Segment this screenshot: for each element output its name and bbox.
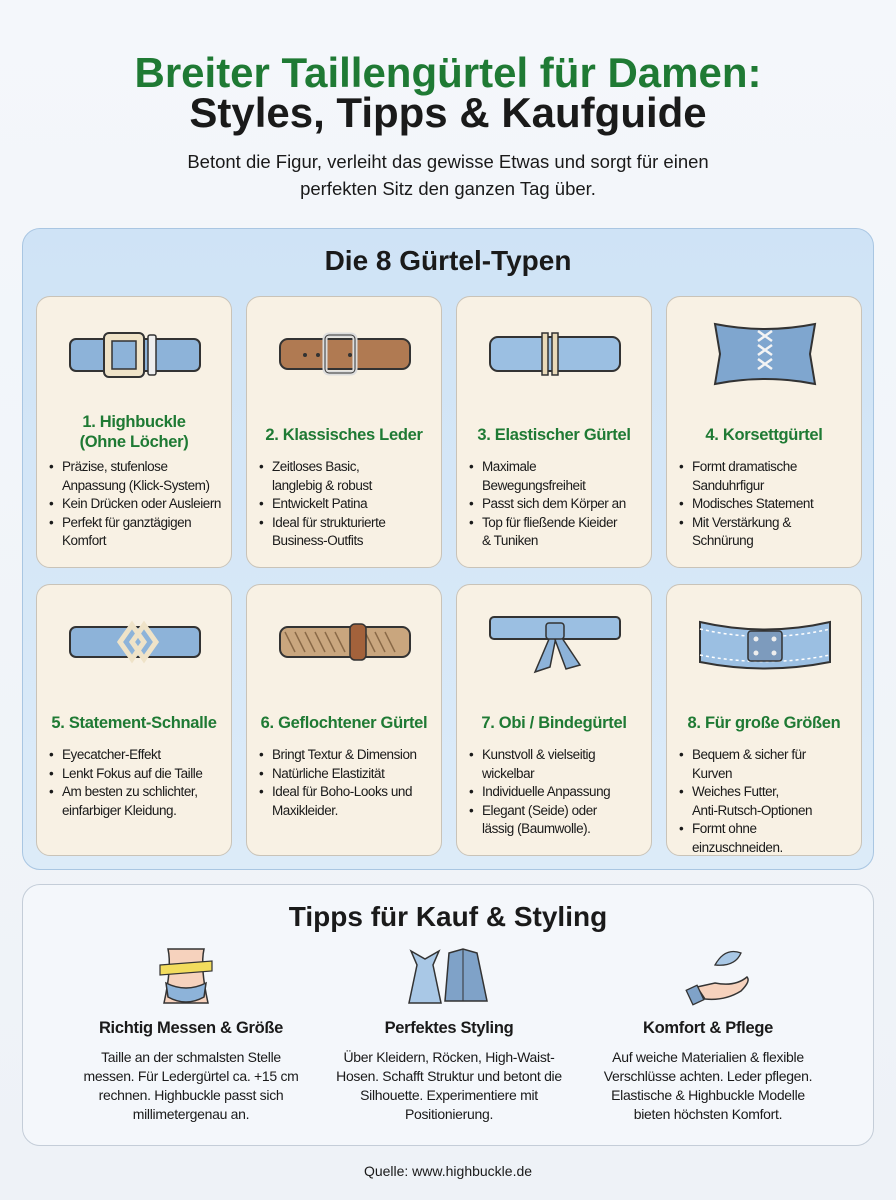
- card 7: [456, 584, 652, 856]
- icon: obi belt: [489, 616, 621, 674]
- card 8: [666, 584, 862, 856]
- bullets 3: Maximale: [482, 459, 536, 474]
- footer: source: Quelle: www.highbuckle.de: [364, 1163, 532, 1179]
- title: Styles, Tipps & Kaufguide: [189, 89, 707, 136]
- bullets 1: Präzise, stufenlose Anpassung (Klick-System): [62, 459, 210, 492]
- title 3: 3. Elastischer Gürtel: [477, 426, 631, 444]
- bullets 7: Kunstvoll & vielseitig wickelbar: [482, 747, 595, 780]
- bullets 4: Modisches Statement: [692, 496, 813, 511]
- bullets 6: [260, 747, 417, 818]
- icon: leather belt: [279, 332, 411, 376]
- bullets 8: Anti-Rutsch-Optionen: [692, 802, 812, 818]
- bullets 1: Perfekt für ganztägigen Komfort: [62, 514, 191, 548]
- tip 1: [83, 948, 299, 1122]
- title 1: (Ohne Löcher): [80, 433, 188, 451]
- bullets 7: Elegant (Seide) oder: [482, 802, 597, 818]
- bullets 4: Schnürung: [692, 533, 753, 548]
- title 1: 1. Highbuckle: [82, 413, 186, 431]
- bullets 2: Ideal für strukturierte Business-Outfits: [272, 514, 385, 548]
- heading: belt types: Die 8 Gürtel-Typen: [325, 245, 571, 276]
- card 3: [456, 296, 652, 568]
- title 7: 7. Obi / Bindegürtel: [481, 714, 627, 732]
- bullets 8: Formt ohne: [692, 821, 757, 836]
- tip 3: Komfort & Pflege: [643, 1019, 773, 1037]
- card 1: [36, 296, 232, 568]
- bullets 2: Zeitloses Basic,: [272, 459, 359, 474]
- icon: measuring tape: [159, 948, 213, 1004]
- icon: hand and feather: [685, 950, 749, 1006]
- tip 1: Richtig Messen & Größe: [99, 1019, 283, 1037]
- bullets 8: einzuschneiden.: [692, 840, 783, 854]
- icon: statement buckle: [69, 621, 201, 663]
- bullets 6: Ideal für Boho-Looks und Maxikleider.: [272, 784, 412, 818]
- bullets 2: langlebig & robust: [272, 478, 372, 492]
- bullets 3: & Tuniken: [482, 533, 538, 548]
- tip 2: Perfektes Styling: [385, 1019, 513, 1037]
- title: [134, 49, 762, 136]
- title 5: 5. Statement-Schnalle: [51, 714, 217, 732]
- bullets 1: Kein Drücken oder Ausleiern: [62, 496, 221, 511]
- tip 3: Auf weiche Materialien & flexible Verschlüsse achten. Leder pflegen. Elastische & Highbuckle Modelle bieten höchsten Komfort.: [604, 1049, 812, 1122]
- icon: plus-size belt: [699, 620, 831, 670]
- bullets 4: Mit Verstärkung &: [692, 514, 791, 530]
- icon: elastic belt: [489, 332, 621, 376]
- title 6: 6. Geflochtener Gürtel: [261, 714, 427, 732]
- title 4: 4. Korsettgürtel: [705, 426, 823, 444]
- bullets 3: Bewegungsfreiheit: [482, 478, 585, 492]
- bullets 4: Sanduhrfigur: [692, 478, 764, 492]
- subtitle: [187, 151, 709, 199]
- bullets 8: [680, 747, 812, 854]
- tip 1: Taille an der schmalsten Stelle messen. Für Ledergürtel ca. +15 cm rechnen. Highbuckle passt sich millimetergenau an.: [83, 1049, 299, 1122]
- bullets 5: Eyecatcher-Effekt: [62, 747, 161, 762]
- bullets 3: Top für fließende Kieider: [482, 514, 617, 530]
- heading: tips: Tipps für Kauf & Styling: [289, 901, 607, 932]
- bullets 7: lässig (Baumwolle).: [482, 821, 590, 836]
- card 5: [36, 584, 232, 856]
- title: Breiter Taillengürtel für Damen:: [134, 49, 762, 96]
- bullets 4: Formt dramatische: [692, 459, 797, 474]
- card 4: [666, 296, 862, 568]
- subtitle: perfekten Sitz den ganzen Tag über.: [300, 178, 596, 199]
- tip 2: [336, 948, 562, 1122]
- bullets 3: Passt sich dem Körper an: [482, 496, 626, 511]
- bullets 6: Bringt Textur & Dimension: [272, 747, 417, 762]
- bullets 2: [260, 459, 386, 548]
- icon: dress and blazer: [408, 948, 488, 1004]
- bullets 1: [50, 459, 221, 548]
- bullets 8: Weiches Futter,: [692, 784, 779, 799]
- icon: braided belt: [279, 623, 411, 661]
- tip 2: Über Kleidern, Röcken, High-Waist-Hosen. Schafft Struktur und betont die Silhouette. Experimentiere mit Positionierung.: [336, 1049, 562, 1122]
- bullets 7: Individuelle Anpassung: [482, 784, 610, 799]
- icon: corset belt: [714, 322, 816, 386]
- bullets 5: Am besten zu schlichter, einfarbiger Kleidung.: [62, 784, 198, 818]
- card 2: [246, 296, 442, 568]
- title 2: 2. Klassisches Leder: [265, 426, 423, 444]
- bullets 6: Natürliche Elastizität: [272, 766, 384, 780]
- bullets 8: Kurven: [692, 766, 732, 780]
- panel: tips: [22, 884, 874, 1146]
- bullets 2: Entwickelt Patina: [272, 496, 367, 511]
- title 8: 8. Für große Größen: [688, 714, 840, 732]
- card 6: [246, 584, 442, 856]
- tip 3: [604, 950, 812, 1122]
- panel: belt types: [22, 228, 874, 870]
- bullets 3: [470, 459, 626, 548]
- title 1: [80, 413, 188, 451]
- bullets 8: Bequem & sicher für: [692, 747, 806, 762]
- bullets 5: Lenkt Fokus auf die Taille: [62, 766, 202, 780]
- bullets 5: [50, 747, 202, 818]
- bullets 7: [470, 747, 610, 836]
- subtitle: Betont die Figur, verleiht das gewisse Etwas und sorgt für einen: [187, 151, 709, 172]
- icon: highbuckle belt: [69, 332, 201, 378]
- bullets 4: [680, 459, 814, 548]
